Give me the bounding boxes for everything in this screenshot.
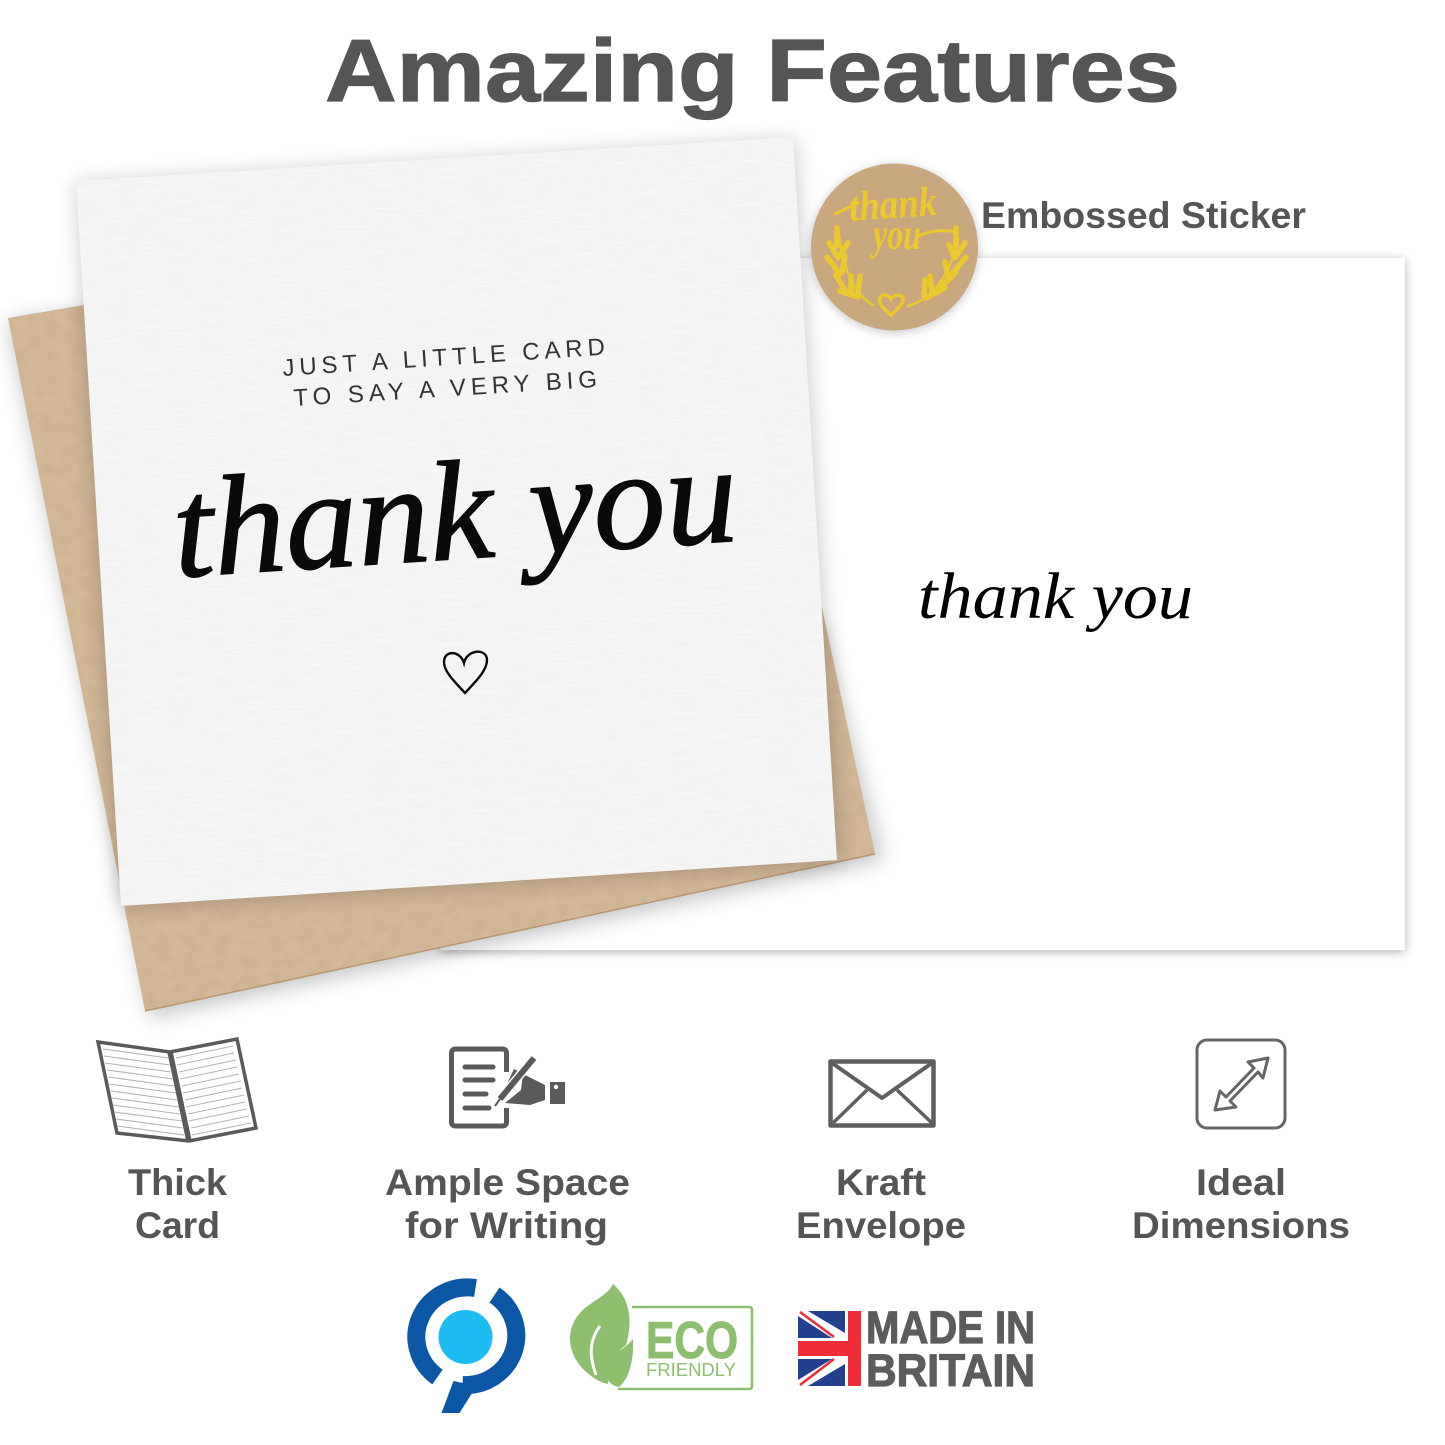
logo: made in britain bbox=[798, 1310, 1033, 1387]
greeting card front bbox=[70, 130, 845, 910]
label: thick card: Thick bbox=[128, 1162, 227, 1203]
label: kraft envelope: Envelope bbox=[796, 1205, 966, 1246]
feature: ideal dimensions bbox=[1132, 1040, 1350, 1246]
feature: kraft envelope bbox=[796, 1062, 966, 1246]
label: ideal dimensions: Dimensions bbox=[1132, 1205, 1350, 1246]
icon: open card bbox=[98, 1039, 256, 1141]
label: ideal dimensions: Ideal bbox=[1196, 1162, 1286, 1203]
label: thick card bbox=[128, 1162, 227, 1246]
feature: thick card bbox=[98, 1039, 256, 1246]
logo: made in britain: BRITAIN bbox=[866, 1345, 1035, 1396]
inside message: thank you bbox=[918, 560, 1193, 633]
sticker wreath and heart bbox=[827, 203, 966, 315]
icon: union flag bbox=[798, 1311, 861, 1386]
card caption bbox=[282, 334, 606, 412]
icon: leaves bbox=[570, 1284, 633, 1387]
label: kraft envelope bbox=[796, 1162, 966, 1246]
icon: writing hand bbox=[452, 1049, 565, 1126]
sticker wording: you bbox=[869, 210, 921, 259]
label: thick card: Card bbox=[135, 1205, 220, 1246]
card script message: thank you bbox=[168, 414, 742, 608]
icon: heart bbox=[444, 652, 487, 693]
card caption: TO SAY A VERY BIG bbox=[293, 366, 598, 412]
label: ample space: for Writing bbox=[405, 1205, 608, 1246]
icon: resize arrows bbox=[1197, 1040, 1285, 1128]
title: Amazing Features bbox=[325, 21, 1180, 120]
icon: envelope bbox=[830, 1062, 934, 1126]
label: ample space bbox=[385, 1162, 630, 1246]
sticker wording: thank bbox=[847, 179, 938, 231]
label: ideal dimensions bbox=[1132, 1162, 1350, 1246]
embossed sticker bbox=[810, 164, 978, 333]
sticker wording bbox=[847, 179, 938, 259]
logo: eco friendly bbox=[570, 1284, 752, 1389]
label: kraft envelope: Kraft bbox=[836, 1162, 926, 1203]
logo: made in britain: MADE IN bbox=[866, 1302, 1035, 1353]
logo: blue circle mark bbox=[416, 1287, 516, 1413]
logo: eco friendly: ECO bbox=[646, 1312, 738, 1370]
card caption: JUST A LITTLE CARD bbox=[282, 334, 606, 382]
feature: ample space bbox=[385, 1049, 630, 1246]
logo: eco friendly: FRIENDLY bbox=[646, 1360, 736, 1380]
sticker label: Embossed Sticker bbox=[981, 195, 1306, 236]
label: ample space: Ample Space bbox=[385, 1162, 630, 1203]
kraft envelope bbox=[0, 300, 884, 1018]
